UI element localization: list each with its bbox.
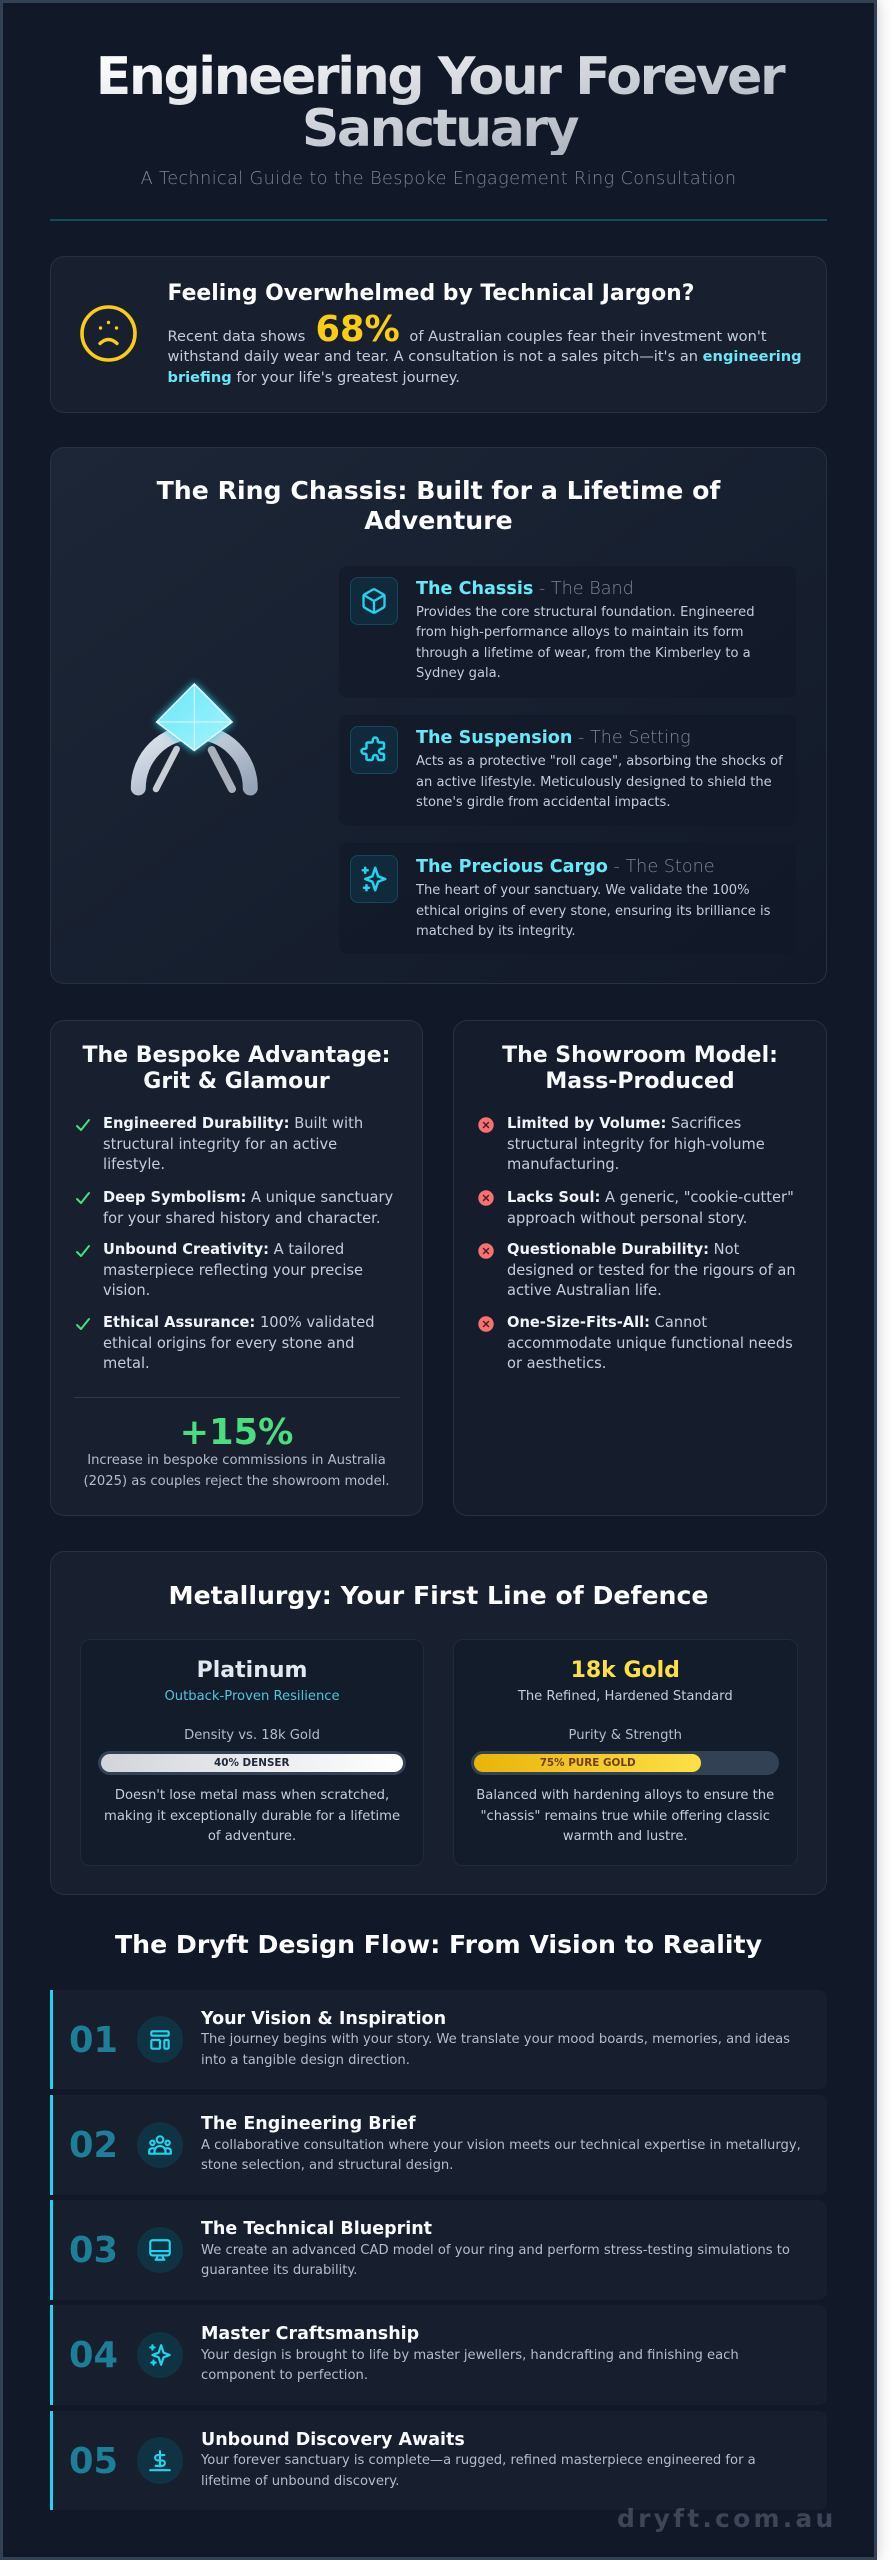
step number: 02: [69, 2125, 118, 2166]
step text: stone selection, and structural design.: [201, 2158, 453, 2173]
step text: [201, 2138, 801, 2173]
card text: [416, 883, 770, 939]
card text: Provides the core structural foundation. Engineered: [416, 605, 755, 620]
metal name: 18k Gold: [571, 1658, 680, 1682]
icon: cross: [478, 1316, 494, 1332]
card text: matched by its integrity.: [416, 924, 576, 939]
step title: Your Vision & Inspiration: [201, 2009, 446, 2029]
bar fill: 40% DENSER: [214, 1757, 290, 1769]
card: the chassis: [339, 566, 796, 698]
step number: 03: [69, 2230, 118, 2271]
metal description: "chassis" remains true while offering classic: [480, 1808, 770, 1824]
panel: bespoke advantage: [50, 1020, 423, 1516]
step 02: [50, 2095, 827, 2194]
heading: showroom model: [502, 1043, 778, 1094]
step text: [201, 2348, 739, 2383]
list item: vision.: [103, 1282, 150, 1299]
heading: showroom model: The Showroom Model:: [502, 1043, 778, 1068]
step number: 05: [69, 2440, 118, 2482]
title: [51, 51, 828, 155]
step text: into a tangible design direction.: [201, 2053, 410, 2068]
card text: an active lifestyle. Meticulously designed to shield the: [416, 775, 772, 790]
list item: metal.: [103, 1355, 150, 1372]
icon: monitor: [137, 2227, 183, 2273]
list item: masterpiece reflecting your precise: [103, 1262, 363, 1279]
step text: lifetime of unbound discovery.: [201, 2474, 399, 2489]
card heading: The Suspension - The Setting: [416, 728, 691, 748]
step text: component to perfection.: [201, 2368, 368, 2383]
heading: showroom model: Mass-Produced: [545, 1069, 735, 1094]
step title: Unbound Discovery Awaits: [201, 2430, 465, 2450]
list item: Limited by Volume: Sacrifices: [507, 1115, 741, 1132]
step text: [201, 2453, 756, 2489]
step text: [201, 2243, 790, 2278]
metal name: Platinum: [197, 1658, 307, 1682]
metal tagline: Outback-Proven Resilience: [164, 1689, 340, 1704]
step title: The Technical Blueprint: [201, 2219, 432, 2239]
bar: density: [98, 1751, 406, 1775]
list item: structural integrity for an active: [103, 1136, 337, 1153]
step number: 01: [69, 2020, 118, 2060]
heading: bespoke advantage: Grit & Glamour: [143, 1069, 330, 1094]
icon: check: [76, 1192, 90, 1204]
list item: [103, 1189, 393, 1226]
list item: accommodate unique functional needs: [507, 1335, 793, 1352]
icon: check: [76, 1245, 90, 1257]
list item: [103, 1115, 363, 1173]
stat caption: (2025) as couples reject the showroom model.: [83, 1474, 390, 1489]
card text: from high-performance alloys to maintain its form: [416, 625, 744, 640]
heading: bespoke advantage: [82, 1043, 390, 1094]
list item: Ethical Assurance: 100% validated: [103, 1314, 375, 1331]
icon: check: [76, 1119, 90, 1131]
list item: Unbound Creativity: A tailored: [103, 1241, 344, 1258]
card text: stone's girdle from accidental impacts.: [416, 795, 671, 810]
list item: structural integrity for high-volume: [507, 1136, 765, 1153]
card text: ethical origins of every stone, ensuring its brilliance is: [416, 904, 770, 919]
heading: feeling overwhelmed: Feeling Overwhelmed by Technical Jargon?: [168, 281, 694, 306]
text: 68 percent statistic: withstand daily wear and tear. A consultation is not a sales pitch—it's an engineering: [168, 348, 802, 365]
icon: cube: [350, 577, 398, 625]
list item: or aesthetics.: [507, 1355, 606, 1372]
card: the suspension: [339, 714, 796, 826]
icon: check: [76, 1318, 90, 1330]
metal description: Doesn't lose metal mass when scratched,: [115, 1788, 389, 1803]
step text: [200, 2032, 790, 2068]
metal description: making it exceptionally durable for a lifetime: [104, 1808, 400, 1824]
bar fill: [474, 1754, 701, 1772]
stat: plus 15 percent: +15%: [180, 1412, 293, 1453]
card text: Acts as a protective "roll cage", absorbing the shocks of: [416, 754, 783, 769]
step text: We create an advanced CAD model of your ring and perform stress-testing simulations to: [201, 2243, 790, 2258]
list item: [103, 1314, 375, 1372]
list item: [103, 1241, 363, 1299]
card text: through a lifetime of wear, from the Kimberley to a: [416, 646, 751, 661]
step text: The journey begins with your story. We translate your mood boards, memories, and ideas: [201, 2032, 790, 2047]
card: the precious cargo: [339, 843, 796, 954]
bar: purity: [471, 1751, 779, 1775]
panel: technical jargon intro: [50, 256, 827, 413]
metal description: [476, 1788, 774, 1844]
stat caption: Increase in bespoke commissions in Australia: [87, 1453, 386, 1468]
list item: lifestyle.: [103, 1156, 165, 1173]
list item: [507, 1314, 793, 1372]
card text: The heart of your sanctuary. We validate the 100%: [416, 883, 750, 898]
icon: cross: [478, 1117, 494, 1133]
list item: manufacturing.: [507, 1156, 619, 1173]
icon: cross: [478, 1190, 494, 1206]
heading: ring chassis: The Ring Chassis: Built for a Lifetime of: [157, 476, 720, 505]
step title: The Engineering Brief: [201, 2114, 416, 2134]
list item: One-Size-Fits-All: Cannot: [507, 1314, 707, 1331]
bar label: Density vs. 18k Gold: [184, 1728, 320, 1743]
list item: active Australian life.: [507, 1282, 662, 1299]
bar fill: 75% PURE GOLD: [540, 1757, 636, 1769]
card text: Sydney gala.: [416, 666, 501, 681]
title: Engineering Your Forever: [96, 47, 783, 107]
step title: Master Craftsmanship: [201, 2324, 419, 2344]
list item: Engineered Durability: Built with: [103, 1115, 363, 1132]
step 01: [50, 1990, 827, 2089]
stat caption: [83, 1453, 390, 1489]
panel: showroom model: [453, 1020, 827, 1516]
metal description: of adventure.: [208, 1829, 296, 1844]
list item: Questionable Durability: Not: [507, 1241, 739, 1258]
step text: Your design is brought to life by master jewellers, handcrafting and finishing each: [201, 2348, 739, 2363]
text: 68 percent statistic: briefing for your life's greatest journey.: [168, 369, 460, 386]
icon: puzzle piece: [350, 726, 398, 774]
step text: guarantee its durability.: [201, 2263, 357, 2278]
metal tagline: The Refined, Hardened Standard: [518, 1689, 733, 1704]
icon: cross: [478, 1243, 494, 1259]
card text: [416, 605, 755, 681]
list item: for your shared history and character.: [103, 1210, 381, 1226]
list item: Deep Symbolism: A unique sanctuary: [103, 1189, 393, 1206]
icon: dollar with baseline: [137, 2437, 183, 2484]
ring diagram: [130, 679, 258, 796]
card heading: The Precious Cargo - The Stone: [416, 856, 715, 876]
list item: approach without personal story.: [507, 1210, 747, 1226]
card: platinum: [80, 1639, 424, 1866]
icon: worried face: [80, 305, 137, 362]
text: 68 percent statistic: Recent data shows 68% of Australian couples fear their investment won't: [168, 309, 767, 350]
icon: people: [137, 2122, 183, 2168]
list item: [507, 1115, 765, 1173]
heading: design flow: The Dryft Design Flow: From Vision to Reality: [115, 1930, 762, 1958]
panel divider: [74, 1397, 400, 1398]
icon: sparkles: [137, 2332, 183, 2378]
panel: metallurgy: [50, 1551, 827, 1895]
step 03: [50, 2200, 827, 2300]
heading: bespoke advantage: The Bespoke Advantage:: [83, 1043, 390, 1068]
icon: template: [137, 2016, 183, 2063]
heading: ring chassis: Adventure: [364, 506, 513, 535]
metal description: [104, 1788, 400, 1844]
step text: Your forever sanctuary is complete—a rugged, refined masterpiece engineered for a: [201, 2453, 756, 2468]
list item: designed or tested for the rigours of an: [507, 1262, 796, 1279]
card: 18k gold: [453, 1639, 798, 1866]
step 05: [50, 2410, 827, 2510]
card text: [416, 754, 783, 810]
list item: ethical origins for every stone and: [103, 1335, 354, 1352]
list item: [507, 1241, 796, 1299]
panel: ring chassis: [50, 447, 827, 984]
step 04: [50, 2305, 827, 2404]
header divider: [50, 219, 827, 221]
text: 68 percent statistic: [168, 309, 802, 386]
subtitle: A Technical Guide to the Bespoke Engagement Ring Consultation: [141, 169, 736, 189]
metal description: Balanced with hardening alloys to ensure the: [476, 1788, 774, 1803]
bar fill: [101, 1754, 403, 1772]
card heading: The Chassis - The Band: [416, 579, 634, 599]
metal description: warmth and lustre.: [563, 1829, 688, 1844]
heading: ring chassis: [156, 476, 721, 535]
watermark: dryft.com.au: [617, 2504, 836, 2533]
list item: Lacks Soul: A generic, "cookie-cutter": [507, 1189, 794, 1206]
icon: sparkles: [350, 855, 398, 903]
heading: metallurgy: Metallurgy: Your First Line of Defence: [168, 1580, 708, 1610]
list item: [507, 1189, 794, 1226]
step number: 04: [69, 2335, 118, 2376]
title: Sanctuary: [302, 99, 577, 159]
bar label: Purity & Strength: [569, 1728, 682, 1743]
step text: A collaborative consultation where your vision meets our technical expertise in metallurgy,: [201, 2138, 801, 2153]
